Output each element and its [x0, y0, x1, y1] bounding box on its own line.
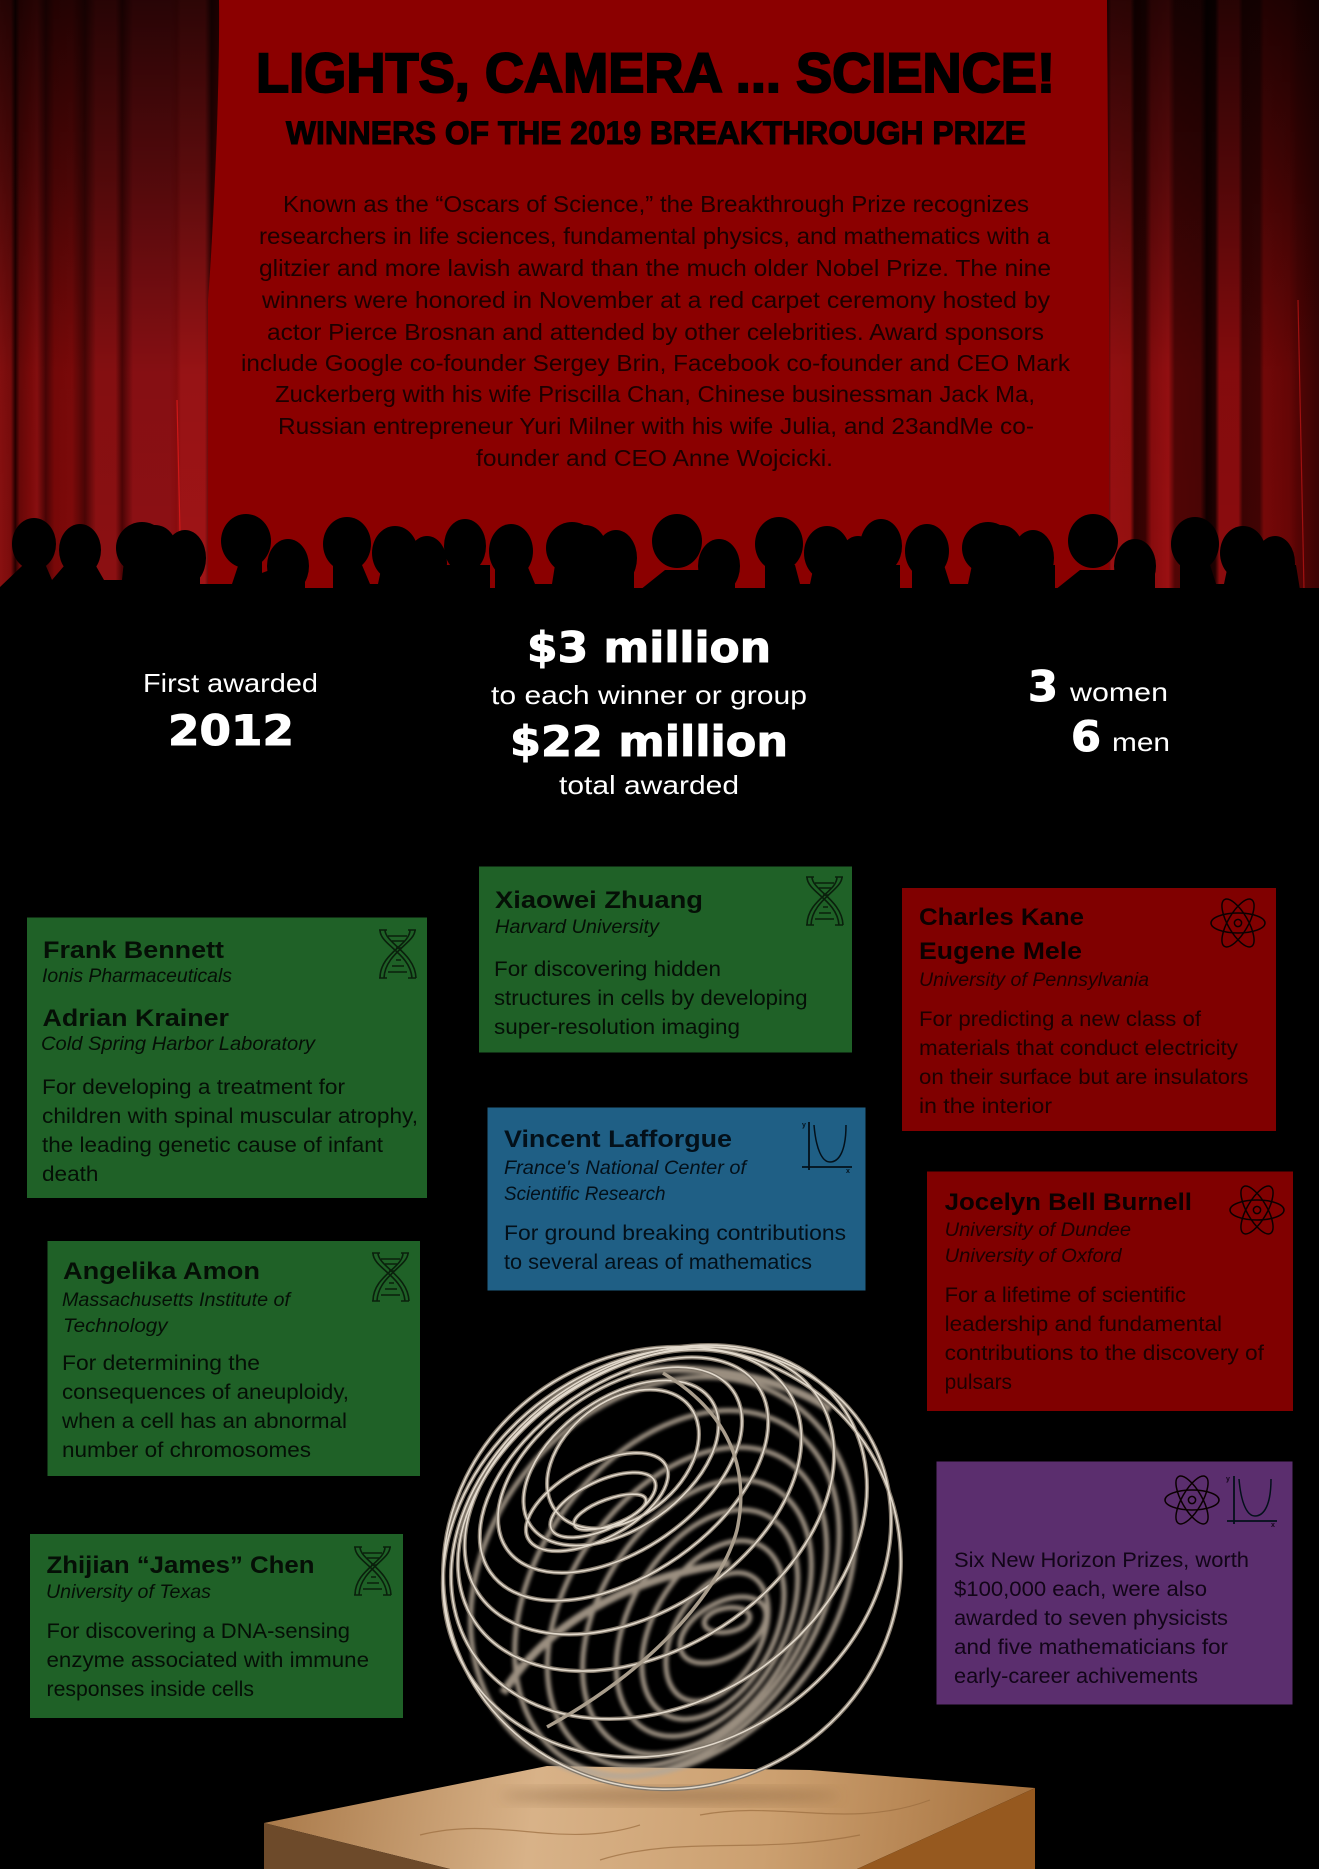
stat: prize money: $3 million — [527, 623, 771, 672]
card: Jocelyn Bell Burnell — [927, 1172, 1293, 1411]
winner details: pulsars — [945, 1371, 1012, 1394]
winner details: Cold Spring Harbor Laboratory — [41, 1033, 316, 1055]
icon: DNA — [379, 930, 416, 978]
winner details: For discovering hidden — [494, 958, 721, 981]
winner details: Zhijian “James” Chen — [46, 1552, 314, 1579]
icon: math graph: x — [1271, 1522, 1275, 1529]
card background — [27, 918, 427, 1198]
winner details: when a cell has an abnormal — [61, 1410, 347, 1433]
winner details: For determining the — [62, 1352, 260, 1375]
intro paragraph: include Google co-founder Sergey Brin, Facebook co-founder and CEO Mark — [241, 350, 1071, 376]
left curtain — [0, 0, 219, 600]
intro paragraph: Known as the “Oscars of Science,” the Breakthrough Prize recognizes — [283, 191, 1029, 217]
winner details: Frank Bennett — [43, 937, 224, 964]
card background — [30, 1534, 403, 1718]
card: Frank Bennett and Adrian Krainer — [27, 918, 427, 1198]
sculpture pedestal — [264, 1766, 1035, 1869]
winner details: France's National Center of — [504, 1157, 749, 1179]
winner details: structures in cells by developing — [494, 987, 808, 1010]
winner details: contributions to the discovery of — [945, 1342, 1264, 1365]
card: Zhijian James Chen — [30, 1534, 403, 1718]
winner details: responses inside cells — [46, 1678, 254, 1701]
card: Xiaowei Zhuang — [479, 866, 852, 1052]
winner details: Vincent Lafforgue — [504, 1126, 732, 1153]
winner details: For developing a treatment for — [42, 1076, 345, 1099]
intro paragraph — [241, 191, 1071, 471]
stat: prize money: total awarded — [559, 770, 739, 800]
winner details: Angelika Amon — [63, 1258, 260, 1285]
winner details: in the interior — [919, 1095, 1052, 1118]
winner details: For predicting a new class of — [919, 1008, 1201, 1031]
subtitle: WINNERS OF THE 2019 BREAKTHROUGH PRIZE — [286, 115, 1026, 151]
prize description: awarded to seven physicists — [954, 1607, 1228, 1630]
winner details: University of Oxford — [945, 1245, 1123, 1267]
winner details: Ionis Pharmaceuticals — [42, 965, 232, 987]
card: Vincent Lafforgue — [488, 1108, 866, 1290]
winner details: Xiaowei Zhuang — [495, 887, 703, 914]
winner details: death — [42, 1163, 98, 1186]
winner details: consequences of aneuploidy, — [62, 1381, 349, 1404]
winner details: on their surface but are insulators — [919, 1066, 1248, 1089]
icon: atom — [1230, 1182, 1284, 1238]
icon: atom — [1165, 1472, 1219, 1528]
icon: DNA — [372, 1253, 409, 1301]
winner details: super-resolution imaging — [494, 1016, 740, 1039]
title: LIGHTS, CAMERA ... SCIENCE! — [256, 41, 1055, 104]
stat: women and men: women — [1069, 677, 1168, 707]
stat: prize money: $22 million — [510, 717, 788, 766]
card background — [902, 888, 1276, 1131]
winner details: Harvard University — [495, 916, 660, 938]
right curtain — [1107, 0, 1319, 600]
icon: atom — [1211, 895, 1265, 951]
winner details — [41, 937, 418, 1186]
intro paragraph: founder and CEO Anne Wojcicki. — [476, 445, 833, 471]
icon: math graph — [1226, 1476, 1277, 1529]
winner details: Eugene Mele — [919, 938, 1082, 965]
card background — [927, 1172, 1293, 1411]
icon: math graph — [802, 1122, 852, 1175]
winner details: number of chromosomes — [62, 1439, 311, 1462]
winner details — [504, 1126, 846, 1274]
intro paragraph: winners were honored in November at a red carpet ceremony hosted by — [261, 287, 1051, 313]
intro paragraph: researchers in life sciences, fundamental physics, and mathematics with a — [259, 223, 1050, 249]
winner details — [61, 1258, 349, 1462]
winner details: materials that conduct electricity — [919, 1037, 1239, 1060]
winner details: University of Texas — [46, 1581, 211, 1603]
stat: women and men: 6 — [1071, 712, 1101, 761]
card background — [936, 1462, 1292, 1704]
prize description: Six New Horizon Prizes, worth — [954, 1549, 1249, 1572]
winner details: For discovering a DNA-sensing — [46, 1620, 350, 1643]
winner details — [494, 887, 808, 1039]
winner details — [945, 1189, 1264, 1394]
card background — [48, 1241, 420, 1476]
icon: DNA — [806, 877, 843, 925]
icon: math graph: y — [1226, 1476, 1230, 1483]
audience silhouette — [0, 514, 1319, 1869]
icon: math graph: x — [846, 1168, 850, 1175]
card: Charles Kane and Eugene Mele — [902, 888, 1276, 1131]
winner details: children with spinal muscular atrophy, — [42, 1105, 418, 1128]
winner details: the leading genetic cause of infant — [42, 1134, 383, 1157]
winner details: For ground breaking contributions — [504, 1222, 846, 1245]
prize description: $100,000 each, were also — [954, 1578, 1207, 1601]
winner details — [46, 1552, 369, 1701]
icon: DNA — [354, 1547, 391, 1595]
intro paragraph: glitzier and more lavish award than the much older Nobel Prize. The nine — [259, 255, 1051, 281]
winner details: to several areas of mathematics — [504, 1251, 812, 1274]
winner details: Technology — [63, 1315, 169, 1337]
stat: prize money: to each winner or group — [491, 680, 807, 710]
stage backdrop — [0, 0, 1319, 640]
stat: prize money — [491, 623, 807, 800]
stat: women and men: 3 — [1028, 662, 1058, 711]
winner details: For a lifetime of scientific — [945, 1284, 1186, 1307]
card background — [479, 866, 852, 1052]
winner details: Charles Kane — [919, 904, 1084, 931]
stat: women and men: men — [1112, 727, 1170, 757]
stat: first awarded — [143, 668, 318, 755]
prize description: and five mathematicians for — [954, 1636, 1228, 1659]
prize description: early-career achivements — [954, 1665, 1198, 1688]
winner details: Scientific Research — [504, 1183, 666, 1205]
card background — [488, 1108, 866, 1290]
stat: first awarded: First awarded — [143, 668, 318, 698]
intro paragraph: actor Pierce Brosnan and attended by other celebrities. Award sponsors — [267, 319, 1044, 345]
card: New Horizon Prizes — [936, 1462, 1292, 1704]
winner details: Massachusetts Institute of — [62, 1289, 293, 1311]
winner details: enzyme associated with immune — [46, 1649, 369, 1672]
winner details — [919, 904, 1248, 1118]
intro paragraph: Russian entrepreneur Yuri Milner with his wife Julia, and 23andMe co- — [278, 413, 1034, 439]
intro paragraph: Zuckerberg with his wife Priscilla Chan, Chinese businessman Jack Ma, — [275, 381, 1035, 407]
wire sphere sculpture — [368, 1267, 966, 1854]
icon: math graph: y — [802, 1122, 806, 1129]
stat: first awarded: 2012 — [168, 706, 294, 755]
prize description — [954, 1549, 1249, 1688]
winner details: University of Pennsylvania — [919, 969, 1149, 991]
winner details: University of Dundee — [945, 1219, 1131, 1241]
winner details: leadership and fundamental — [945, 1313, 1222, 1336]
winner details: Jocelyn Bell Burnell — [945, 1189, 1192, 1216]
winner details: Adrian Krainer — [42, 1005, 229, 1032]
stat: women and men — [1028, 662, 1170, 761]
card: Angelika Amon — [48, 1241, 420, 1476]
